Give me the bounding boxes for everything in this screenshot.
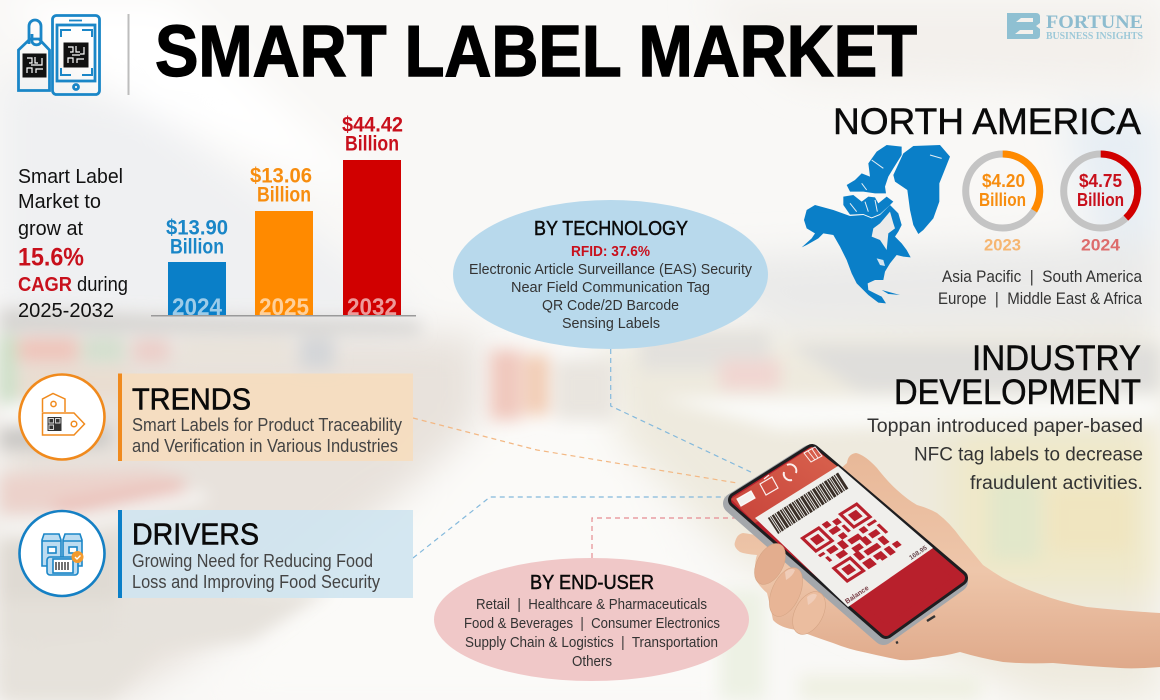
text block: market growth: 15.6% — [18, 244, 84, 272]
donut: 2024 — [1064, 154, 1138, 255]
bar chart: Billion — [257, 184, 311, 207]
barcode — [773, 480, 844, 526]
title: SMART LABEL MARKET — [155, 12, 917, 92]
text block: market growth: 2025-2032 — [18, 300, 114, 322]
icon: logo mark — [1007, 13, 1040, 39]
other regions: Asia Pacific | South America — [942, 268, 1143, 286]
text block: market growth: CAGR during — [18, 274, 128, 296]
photo: hand holding phone — [731, 447, 1160, 668]
text block: market growth: Market to — [18, 191, 101, 213]
drivers heading: DRIVERS — [132, 516, 259, 552]
donut: 2024: Billion — [1077, 190, 1124, 210]
drivers text — [132, 551, 380, 592]
drivers icon — [20, 511, 104, 596]
panel: by technology — [453, 200, 768, 349]
technology heading: BY TECHNOLOGY — [534, 218, 688, 240]
end-user list: Food & Beverages | Consumer Electronics — [464, 616, 720, 632]
donut: 2024: 2024 — [1081, 236, 1121, 255]
divider — [128, 14, 130, 95]
donut: 2023: Billion — [979, 190, 1026, 210]
end-user list: Supply Chain & Logistics | Transportation — [465, 635, 718, 651]
balance amount: 168.95 — [908, 545, 929, 562]
other regions — [938, 268, 1143, 308]
bar chart: Billion — [345, 133, 399, 156]
drivers text: Loss and Improving Food Security — [132, 572, 380, 592]
technology list: QR Code/2D Barcode — [542, 297, 679, 314]
phone ports — [896, 616, 935, 643]
heading: industry development: DEVELOPMENT — [894, 373, 1141, 412]
industry development text: Toppan introduced paper-based — [867, 416, 1143, 437]
trends text: and Verification in Various Industries — [132, 436, 398, 456]
connector lines — [413, 349, 753, 558]
logo name: FORTUNE — [1046, 12, 1143, 33]
logo — [1007, 12, 1143, 42]
bar chart: $44.42 — [342, 114, 403, 137]
donut: 2024: $4.75 — [1079, 171, 1122, 191]
industry development text: fraudulent activities. — [970, 473, 1143, 494]
bar chart: 2032 — [347, 294, 397, 321]
balance label: Balance — [844, 585, 870, 606]
donut: 2023: 2023 — [984, 236, 1021, 255]
fingers — [748, 538, 832, 640]
end-user list — [464, 597, 720, 670]
heading: industry development: INDUSTRY — [972, 339, 1141, 378]
trends text: Smart Labels for Product Traceability — [132, 415, 402, 435]
trends icon — [20, 374, 104, 460]
text block: market growth — [18, 166, 128, 322]
icon: smart tag and phone — [18, 16, 100, 94]
text block: market growth: Smart Label — [18, 166, 123, 188]
other regions: Europe | Middle East & Africa — [938, 290, 1143, 308]
drivers text: Growing Need for Reducing Food — [132, 551, 373, 571]
bar chart: Billion — [170, 236, 224, 259]
bar chart — [151, 114, 416, 321]
technology list: Near Field Communication Tag — [511, 279, 710, 296]
end-user heading: BY END-USER — [530, 572, 654, 594]
heading: north america: NORTH AMERICA — [833, 101, 1141, 142]
industry development text — [867, 416, 1143, 494]
trends heading: TRENDS — [132, 382, 251, 416]
end-user list: Retail | Healthcare & Pharmaceuticals — [476, 597, 707, 613]
panel: by end-user — [434, 558, 749, 681]
technology share: RFID: 37.6% — [571, 244, 650, 260]
QR code — [800, 502, 904, 583]
text block: market growth: grow at — [18, 218, 83, 240]
industry development text: NFC tag labels to decrease — [914, 444, 1143, 466]
heading: industry development — [894, 339, 1141, 412]
trends text — [132, 415, 402, 456]
logo subtitle: BUSINESS INSIGHTS — [1046, 31, 1143, 42]
phone screen label panel — [755, 466, 933, 607]
phone — [731, 447, 960, 643]
technology list: Sensing Labels — [562, 315, 660, 332]
phone app icons — [737, 447, 822, 506]
hand — [735, 453, 1160, 668]
donut: 2023: $4.20 — [982, 171, 1025, 191]
bar chart: 2024 — [172, 294, 223, 321]
bar chart: $13.90 — [166, 217, 228, 240]
map: north america — [802, 145, 950, 303]
donut: 2023 — [966, 154, 1040, 255]
technology list: Electronic Article Surveillance (EAS) Security — [469, 261, 752, 278]
end-user list: Others — [572, 654, 612, 670]
panel: drivers — [20, 510, 413, 598]
technology list — [469, 261, 752, 332]
panel: trends — [20, 374, 413, 461]
bar chart: 2025 — [259, 294, 309, 321]
bar chart: $13.06 — [250, 165, 312, 188]
